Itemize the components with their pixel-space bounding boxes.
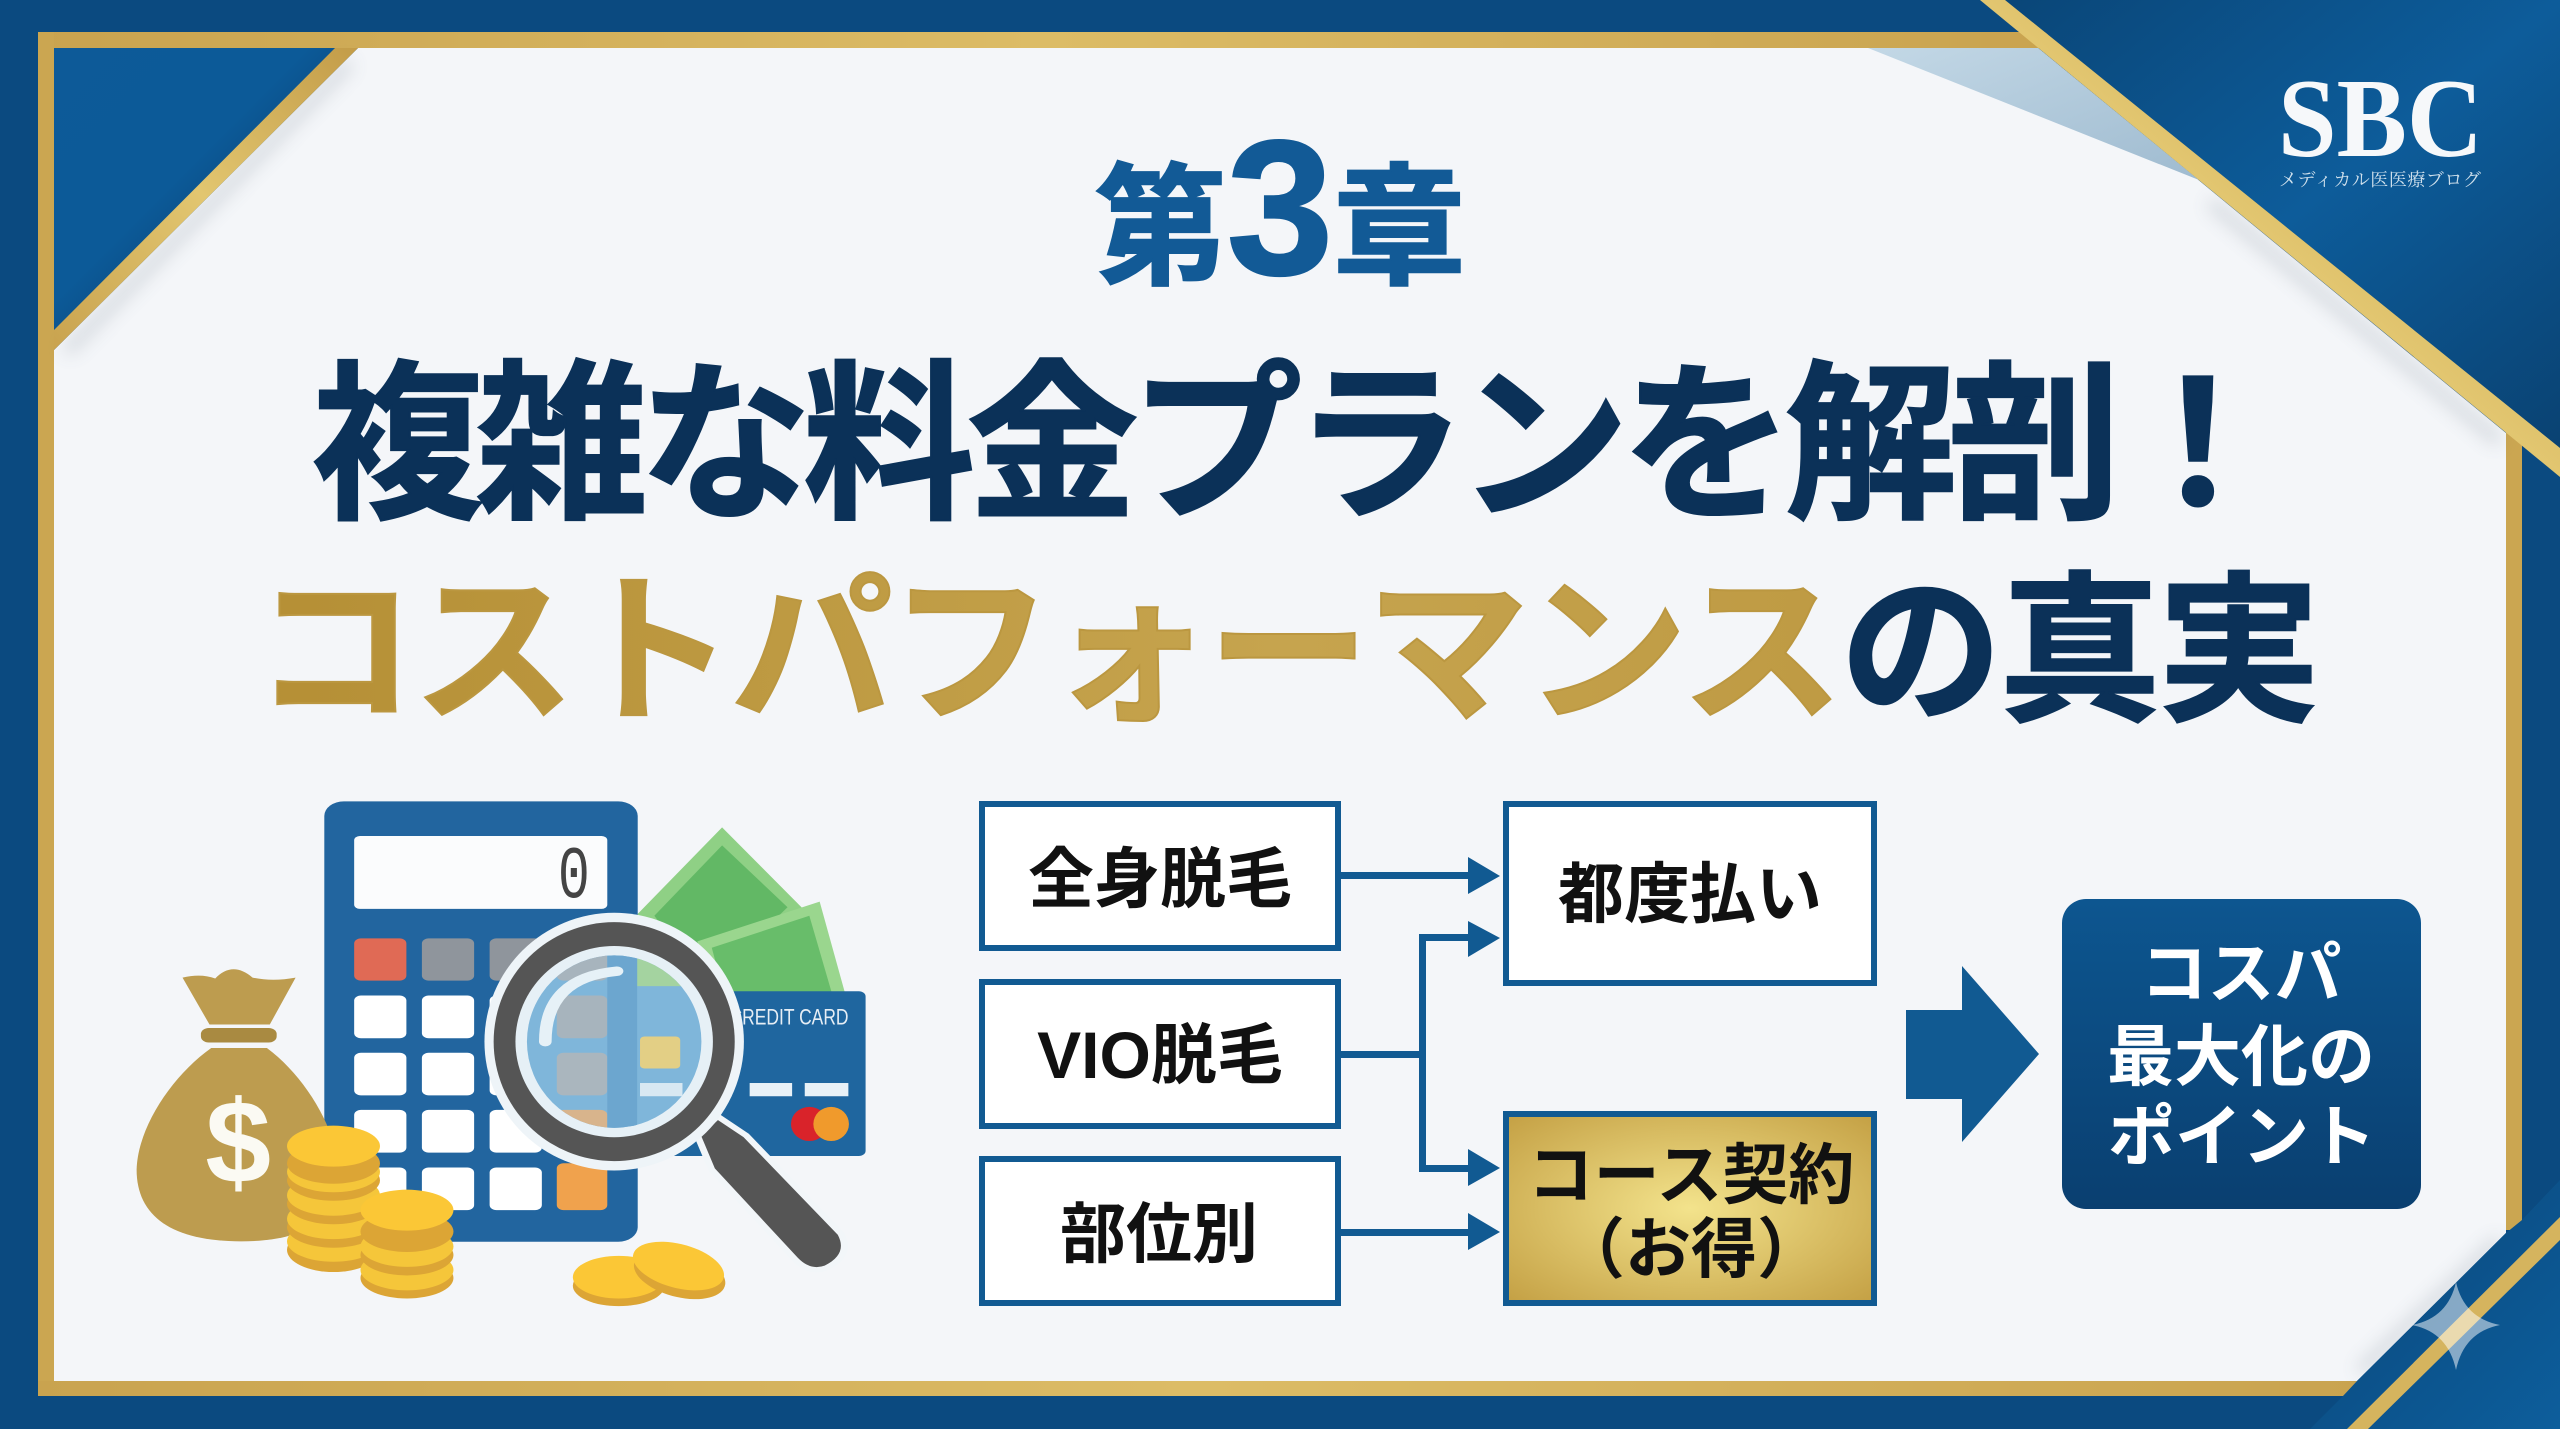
box: VIO脱毛: VIO脱毛 bbox=[1037, 1018, 1283, 1092]
arrow: 部位別 to コース契約 bbox=[1340, 1213, 1500, 1250]
box: コース契約（お得）: コース契約 bbox=[1528, 1138, 1854, 1212]
box: 都度払い bbox=[1506, 804, 1874, 983]
illustration: finance bbox=[137, 801, 866, 1309]
icon: credit card: CREDIT CARD bbox=[730, 1005, 849, 1030]
icon: coin stack left bbox=[287, 1126, 380, 1272]
box: 部位別: 部位別 bbox=[1060, 1197, 1258, 1271]
icon: money bag: $ bbox=[205, 1076, 271, 1208]
box: コスパ最大化のポイント bbox=[2062, 899, 2421, 1209]
title line 2: コストパフォーマンスの真実 bbox=[254, 562, 2320, 743]
arrow: large to result bbox=[1906, 966, 2039, 1142]
icon: credit card bbox=[631, 991, 866, 1156]
box: コスパ最大化のポイント: コスパ bbox=[2140, 937, 2342, 1012]
box: コスパ最大化のポイント: ポイント bbox=[2108, 1100, 2376, 1175]
corner: bottom right with sparkle bbox=[2310, 1180, 2560, 1429]
corner: top right with logo bbox=[1980, 0, 2560, 477]
box: 部位別 bbox=[982, 1159, 1338, 1303]
icon: banknotes bbox=[637, 827, 847, 999]
box: コース契約（お得） bbox=[1506, 1114, 1874, 1303]
corner: top left triangle bbox=[54, 48, 358, 350]
icon: magnifying glass bbox=[484, 913, 844, 1270]
logo: SBC: メディカル医医療ブログ bbox=[2279, 170, 2481, 190]
icon: calculator: 0 bbox=[558, 836, 590, 920]
title line 1: 複雑な料金プランを解剖！ bbox=[312, 350, 2284, 542]
box: 全身脱毛 bbox=[982, 804, 1338, 948]
box: 都度払い: 都度払い bbox=[1558, 857, 1822, 931]
box: VIO脱毛 bbox=[982, 982, 1338, 1126]
chapter heading: 第3章 bbox=[1095, 100, 1465, 315]
arrow: 全身脱毛 to 都度払い bbox=[1340, 857, 1500, 894]
icon: money bag bbox=[137, 969, 339, 1241]
icon: loose coins bbox=[573, 1232, 736, 1309]
icon: calculator bbox=[324, 801, 638, 1242]
box: コース契約（お得）: （お得） bbox=[1559, 1212, 1823, 1286]
arrow: VIO脱毛 branch bbox=[1340, 921, 1500, 1186]
box: 全身脱毛: 全身脱毛 bbox=[1028, 842, 1292, 916]
icon: sparkle bbox=[2412, 1282, 2500, 1370]
icon: coin stack right bbox=[360, 1190, 453, 1298]
logo: SBC: SBC bbox=[2278, 57, 2483, 181]
light blue fold triangle bbox=[1868, 48, 2199, 180]
flow diagram bbox=[982, 804, 2421, 1303]
box: コスパ最大化のポイント: 最大化の bbox=[2107, 1020, 2375, 1095]
